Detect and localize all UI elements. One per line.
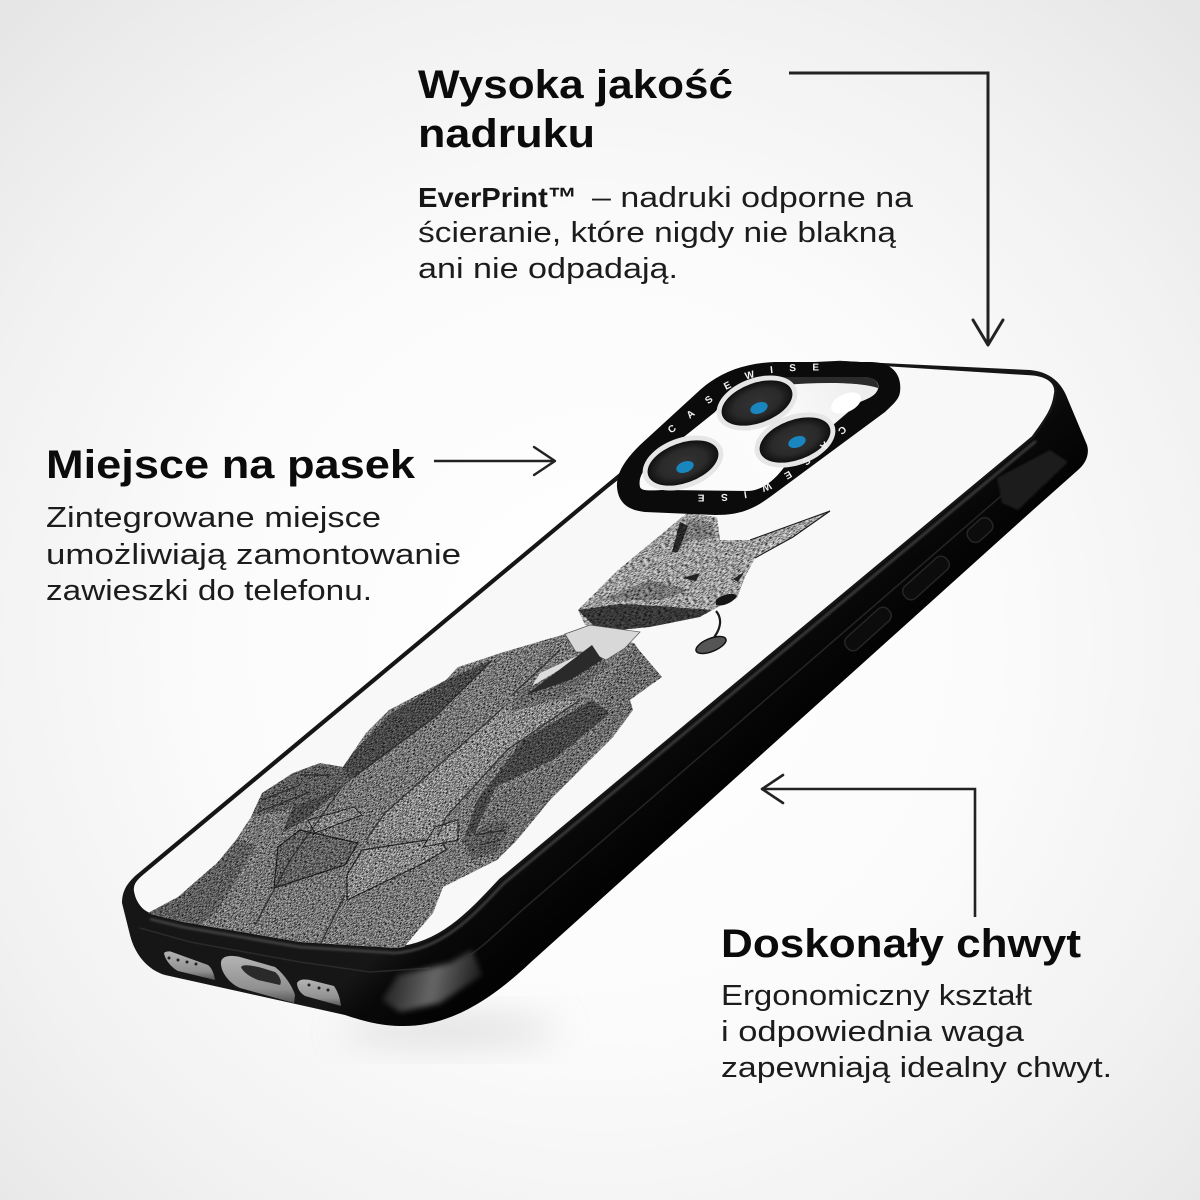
callout: grip <box>721 922 1112 1084</box>
pipe <box>695 610 727 654</box>
screen panel <box>132 362 1056 948</box>
camera ring <box>617 362 900 515</box>
bottom rim line <box>140 928 430 972</box>
body line two: ścieranie, które nigdy nie blakną <box>418 217 897 249</box>
jaw shading <box>578 604 712 632</box>
waistcoat light panel <box>366 700 580 840</box>
brand text top: CASEWISE <box>668 364 819 432</box>
fox nose <box>716 594 737 606</box>
brand text bottom: CASEWISE <box>698 426 846 502</box>
right pocket flap <box>423 820 458 847</box>
side action patch <box>997 450 1068 510</box>
hand cuff right <box>462 820 512 860</box>
lower left trouser shadow <box>148 840 256 930</box>
left sleeve <box>251 763 350 817</box>
right coat tail <box>347 838 446 900</box>
charging port <box>221 956 295 1003</box>
right lapel dark <box>462 700 611 845</box>
side groove <box>470 452 1052 955</box>
phone case <box>122 361 1088 1026</box>
body line one: Zintegrowane miejsce <box>46 502 381 534</box>
side button high <box>900 553 952 603</box>
body line three: zapewniają idealny chwyt. <box>721 1052 1112 1084</box>
heading: Wysoka jakość <box>418 63 733 107</box>
glass inner shadow <box>770 377 878 388</box>
callout: print quality <box>418 63 914 285</box>
ear slit <box>672 522 688 552</box>
brand word: EverPrint™ <box>418 182 577 213</box>
inner ear left <box>680 520 716 548</box>
hatch texture <box>148 634 662 948</box>
left speaker <box>164 951 215 980</box>
fur texture <box>578 513 826 630</box>
phone shadow <box>340 1017 560 1043</box>
body line two: umożliwiają zamontowanie <box>46 539 461 571</box>
arrow: grip <box>762 775 975 917</box>
shirt front <box>532 655 579 686</box>
shirt collar <box>565 625 640 660</box>
fold lines <box>255 650 580 945</box>
waistcoat neck dark <box>510 660 610 712</box>
side button low <box>842 604 894 654</box>
left coat tail <box>274 830 358 888</box>
reflection <box>828 388 864 418</box>
body line three: ani nie odpadają. <box>418 253 678 285</box>
lens top <box>709 365 805 441</box>
arrow: print quality <box>789 73 1003 345</box>
heading: Doskonały chwyt <box>721 922 1081 966</box>
right coat <box>473 643 662 860</box>
right speaker <box>297 979 341 1006</box>
lens right <box>747 402 843 478</box>
body line one: – nadruki odporne na <box>592 182 914 214</box>
body line two: i odpowiednia waga <box>721 1016 1025 1048</box>
fox eyes <box>682 572 744 582</box>
left pocket flap <box>308 807 362 833</box>
camera module <box>616 362 900 515</box>
suit <box>148 634 662 948</box>
body line three: zawieszki do telefonu. <box>46 575 372 607</box>
muzzle streak <box>600 580 690 600</box>
head <box>578 513 826 630</box>
tie <box>526 645 602 695</box>
heading line two: nadruku <box>418 112 595 156</box>
callout: strap slot <box>46 443 461 607</box>
corner gloss <box>382 950 482 1012</box>
illustration: fox in suit <box>148 362 900 948</box>
case body <box>122 361 1088 1026</box>
inner ear right <box>755 516 820 556</box>
trouser lower <box>200 912 404 947</box>
heading: Miejsce na pasek <box>46 443 416 487</box>
side switch <box>964 515 996 545</box>
lens left <box>635 425 731 501</box>
fox ear outline <box>750 511 830 558</box>
camera glass <box>640 377 878 491</box>
arrow: strap slot <box>434 447 555 475</box>
left coat shadow <box>282 660 492 833</box>
body line one: Ergonomiczny kształt <box>721 980 1032 1012</box>
rim highlight <box>150 441 1036 953</box>
